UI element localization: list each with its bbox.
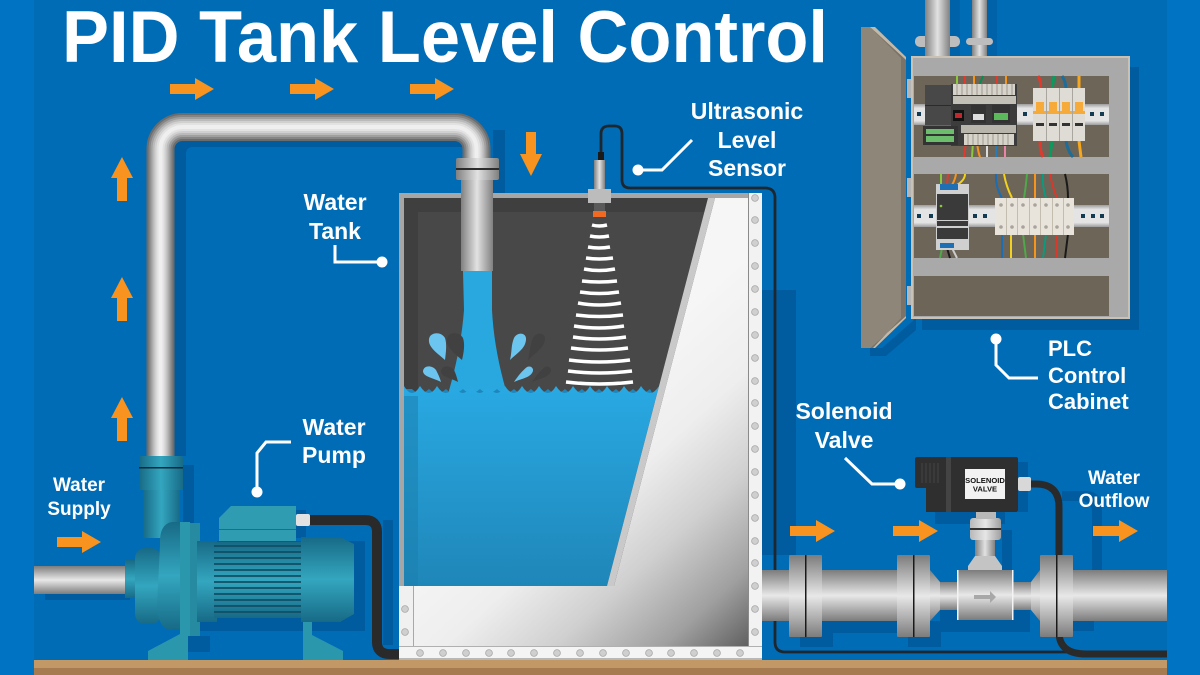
- wires row two: [940, 174, 1068, 258]
- arrow: down into tank: [520, 132, 542, 176]
- inlet pipe inside tank: [461, 180, 493, 271]
- tank cut-away white wall: [404, 198, 749, 648]
- flange three: [1040, 555, 1073, 637]
- pump outlet flange: [143, 488, 180, 538]
- label: water pump: Pump: [302, 442, 366, 468]
- arrows: riser flow up: [111, 157, 133, 441]
- conduit pipes above cabinet: [915, 0, 993, 57]
- pipe runs: [762, 570, 897, 621]
- label: water supply: Water: [53, 475, 106, 496]
- arrows: top pipe flow: [170, 78, 454, 100]
- label: solenoid valve: Valve: [815, 427, 873, 453]
- label: plc control cabinet: PLC: [1048, 336, 1092, 361]
- label: water supply: [47, 475, 111, 520]
- PLC module: [923, 84, 1017, 146]
- solenoid label: [965, 469, 1005, 499]
- label: water tank: [303, 189, 388, 268]
- label: water tank: Tank: [309, 218, 361, 244]
- label: water pump: [252, 414, 366, 498]
- tank interior: [404, 198, 749, 586]
- pump power cable: [296, 514, 402, 654]
- valve stem: [968, 512, 1002, 570]
- sound waves: [566, 225, 633, 384]
- water tank: [399, 158, 762, 660]
- circuit breakers: [1033, 88, 1085, 141]
- label: ultrasonic level sensor: Level: [718, 127, 776, 153]
- label: plc control cabinet: Cabinet: [1048, 389, 1129, 414]
- valve body: [957, 570, 1014, 620]
- label: water pump: Water: [302, 414, 366, 440]
- drop shadows: [441, 333, 551, 382]
- label: water outflow: [1079, 468, 1150, 512]
- flange one: [789, 555, 822, 637]
- label: water outflow: Water: [1088, 468, 1141, 489]
- riser pipe: [160, 127, 476, 462]
- din rail one: [914, 104, 1109, 125]
- motor: [197, 541, 217, 622]
- door hinges: [907, 79, 912, 305]
- flange two: [897, 555, 930, 637]
- water stream: [448, 271, 507, 394]
- din rail two: [914, 205, 1109, 227]
- water body: [404, 386, 659, 586]
- water splash drops: [423, 333, 533, 382]
- arrow: supply: [57, 531, 101, 553]
- ultrasonic level sensor: [588, 152, 611, 217]
- label: plc control cabinet: [990, 334, 1129, 414]
- terminal box: [219, 506, 296, 541]
- PLC control cabinet: [861, 27, 1130, 348]
- wires row one: [957, 76, 1081, 157]
- outflow pipe assembly: [762, 457, 1167, 654]
- arrows: outflow: [790, 520, 1138, 542]
- label: ultrasonic level sensor: Ultrasonic: [691, 98, 803, 124]
- water pump: [125, 456, 354, 660]
- terminal block: [995, 198, 1074, 235]
- label: ultrasonic level sensor: [632, 98, 803, 181]
- power supply: [936, 184, 969, 250]
- tank lower left strip: [399, 586, 414, 648]
- floor: [34, 660, 1167, 675]
- label: ultrasonic level sensor: Sensor: [708, 155, 786, 181]
- water back waves: [404, 389, 657, 402]
- solenoid head: VALVE: [973, 484, 997, 494]
- label: solenoid valve: [795, 398, 906, 490]
- cable from solenoid: [1030, 484, 1059, 560]
- water supply inlet pipe: [34, 566, 126, 594]
- diagonal cut edge: [607, 198, 715, 586]
- cabinet door: [861, 27, 906, 348]
- pump volute: [125, 560, 136, 598]
- tank outer frame: [399, 193, 762, 660]
- label: water supply: Supply: [47, 499, 111, 520]
- solenoid head: [915, 457, 1031, 512]
- back panels: [914, 76, 1109, 316]
- label: water outflow: Outflow: [1079, 491, 1150, 512]
- label: solenoid valve: Solenoid: [795, 398, 893, 424]
- cabinet body: [911, 56, 1130, 319]
- solenoid head: SOLENOID: [965, 476, 1005, 485]
- ultrasonic sensor cable: [601, 126, 1167, 652]
- pump feet: [148, 634, 188, 660]
- pipe flange: [456, 158, 499, 180]
- tank right rivet strip: [748, 193, 762, 660]
- label: water tank: Water: [303, 189, 367, 215]
- tank bottom rivet strip: [399, 606, 762, 660]
- label: plc control cabinet: Control: [1048, 363, 1126, 388]
